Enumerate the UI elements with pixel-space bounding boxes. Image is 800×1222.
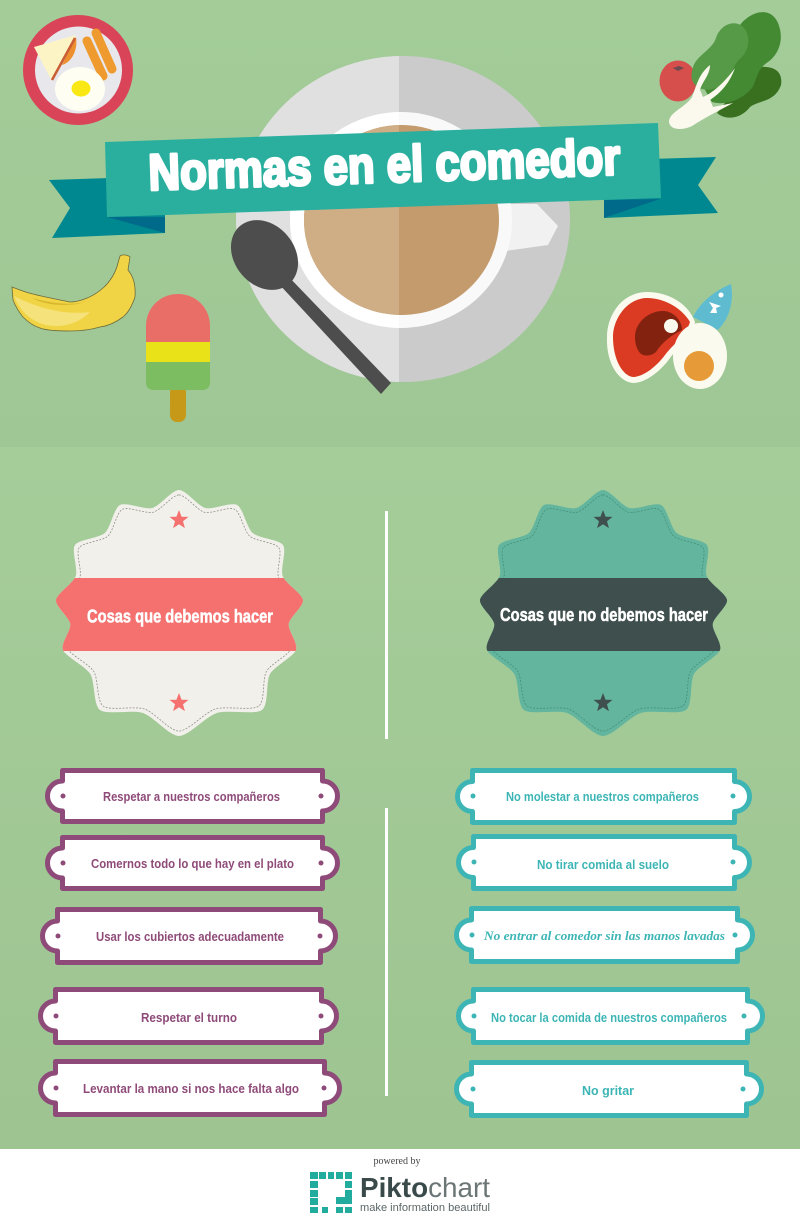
plaque: comernos todo: Comernos todo lo que hay en el plato xyxy=(91,857,294,871)
icon: plate with breakfast xyxy=(23,15,133,125)
plaque: no entrar sin manos lavadas: No entrar al comedor sin las manos lavadas xyxy=(483,928,725,943)
plaque: usar los cubiertos: Usar los cubiertos adecuadamente xyxy=(96,930,284,944)
list: things not to do xyxy=(456,770,763,1116)
icon: popsicle xyxy=(146,294,210,422)
icon: banana xyxy=(12,255,135,331)
illustration: coffee cup on saucer xyxy=(236,56,570,382)
ribbon main band xyxy=(105,123,661,217)
plaque: respetar a nuestros compañeros: Respetar a nuestros compañeros xyxy=(103,790,280,804)
divider: top xyxy=(385,511,388,739)
plaque: respetar el turno: Respetar el turno xyxy=(141,1011,237,1025)
illustration: spoon xyxy=(217,207,391,394)
footer xyxy=(0,1149,800,1222)
divider: bottom xyxy=(385,808,388,1096)
badge label: Cosas que no debemos hacer xyxy=(500,605,708,625)
badge label: Cosas que debemos hacer xyxy=(87,606,273,626)
badge band xyxy=(56,578,303,651)
icon: meat, egg and fish xyxy=(607,284,732,389)
plaque: no molestar xyxy=(458,770,750,822)
plaque: levantar la mano xyxy=(41,1062,340,1114)
plaque: no tocar la comida: No tocar la comida de nuestros compañeros xyxy=(491,1011,727,1025)
piktochart wordmark: Piktochart xyxy=(360,1172,490,1203)
star bottom xyxy=(170,693,188,711)
plaque: no molestar: No molestar a nuestros compañeros xyxy=(506,790,699,804)
plaque: no entrar sin manos lavadas xyxy=(456,908,752,962)
ribbon left tail xyxy=(49,178,165,238)
tagline: make information beautiful xyxy=(360,1202,490,1214)
plaque: comernos todo xyxy=(48,838,338,888)
star top xyxy=(170,510,188,528)
background: lower section xyxy=(0,447,800,1149)
powered by: powered by xyxy=(374,1156,420,1167)
star top xyxy=(594,510,612,528)
star bottom xyxy=(594,693,612,711)
title: Normas en el comedor xyxy=(147,128,621,201)
badge: cosas que no debemos hacer xyxy=(480,490,727,736)
plaque: respetar el turno xyxy=(41,990,337,1042)
badge: cosas que debemos hacer xyxy=(56,490,303,736)
plaque: no tocar la comida xyxy=(458,990,763,1042)
badge band xyxy=(480,578,727,651)
list: things to do xyxy=(41,770,340,1114)
icon: apple and greens xyxy=(660,12,781,129)
piktochart logo mark xyxy=(310,1172,352,1213)
background: header xyxy=(0,0,800,447)
plaque: levantar la mano: Levantar la mano si nos hace falta algo xyxy=(83,1082,299,1096)
plaque: no tirar comida: No tirar comida al suelo xyxy=(537,858,669,872)
plaque: no tirar comida xyxy=(458,836,750,888)
plaque: respetar a nuestros compañeros xyxy=(48,770,338,822)
ribbon right tail xyxy=(604,157,718,218)
plaque: no gritar xyxy=(456,1062,762,1116)
plaque: no gritar: No gritar xyxy=(582,1084,634,1098)
title ribbon xyxy=(49,123,718,238)
plaque: usar los cubiertos xyxy=(43,910,336,962)
